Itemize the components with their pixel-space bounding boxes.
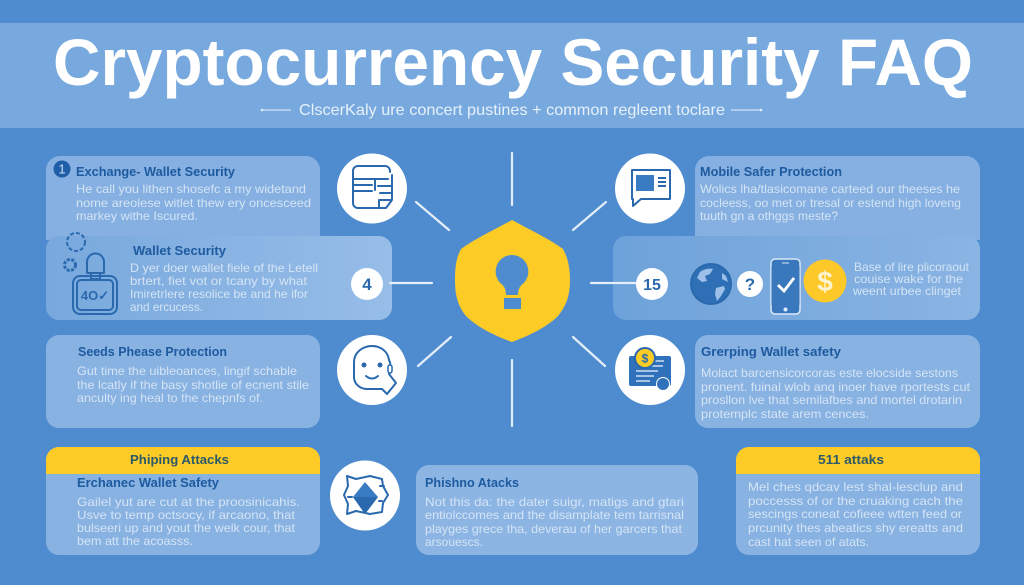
panel: phishing attacks bbox=[416, 465, 698, 555]
panel: exchange wallet security: Exchange- Wallet Security bbox=[76, 164, 236, 179]
panel: 511 attacks: prcunity thes abeatics shy ereatts and bbox=[748, 521, 963, 535]
panel: phiping attacks: bem att the acoasss. bbox=[77, 534, 193, 548]
panel: wallet security bbox=[46, 233, 392, 320]
panel: 511 attacks: Mel ches qdcav lest shal-lesclup and bbox=[748, 480, 963, 494]
title: Cryptocurrency Security FAQ bbox=[53, 25, 973, 99]
icon: lightbulb bbox=[496, 255, 528, 309]
panel: seeds phrase protection bbox=[46, 335, 320, 428]
badge: number 1: 1 bbox=[58, 162, 66, 176]
header band bbox=[0, 23, 1024, 128]
connector lines bbox=[390, 153, 636, 426]
panel: grerping wallet safety: prosllon lve that semilafbes and mortel drotarin bbox=[701, 393, 962, 407]
panel: exchange wallet security: markey withe Iscured. bbox=[76, 209, 198, 223]
panel: globe phone dollar: Base of lire plicoraout bbox=[854, 260, 970, 274]
panel: phiping attacks bbox=[46, 447, 320, 555]
panel: mobile safer protection bbox=[695, 156, 980, 240]
panel: wallet security: D yer doer wallet fiele of the Letell bbox=[130, 261, 318, 275]
panel: globe phone dollar bbox=[613, 236, 980, 320]
panel: seeds phrase protection: Seeds Phease Protection bbox=[78, 344, 227, 359]
panel: grerping wallet safety: pronent. fuinal wlob anq inoer have rportests cut bbox=[701, 380, 971, 394]
yellow header bbox=[736, 447, 980, 474]
panel: wallet security: Wallet Security bbox=[133, 243, 227, 258]
panel: mobile safer protection: tuuth gn a othggs meste? bbox=[700, 209, 838, 223]
panel: phishing attacks: entiolccomes and the disamplate tem tarrisnal bbox=[425, 508, 684, 522]
panel: phiping attacks: Erchanec Wallet Safety bbox=[77, 475, 220, 490]
icon: question mark: ? bbox=[745, 275, 755, 294]
panel: seeds phrase protection: Gut time the uibleoances, lingif schable bbox=[77, 364, 297, 378]
panel: grerping wallet safety bbox=[695, 335, 980, 428]
icon: wallet document circle bbox=[337, 154, 407, 224]
yellow header: 511 attaks bbox=[818, 452, 884, 467]
panel: 511 attacks bbox=[736, 447, 980, 555]
panel: exchange wallet security bbox=[46, 156, 320, 240]
icon: padlock with gears: 4O✓ bbox=[81, 288, 109, 303]
icon: globe bbox=[691, 264, 731, 304]
panel: grerping wallet safety: Grerping Wallet safety bbox=[701, 344, 842, 359]
panel: wallet security: and ercucess. bbox=[130, 300, 203, 314]
panel: phiping attacks: Usve to temp octsocy, if arcaono, that bbox=[77, 508, 296, 522]
panel: phishing attacks: playges grece tha, deverau of her garcers that bbox=[425, 522, 683, 536]
icon: dollar document circle: $ bbox=[642, 352, 649, 366]
number badge 15 bbox=[636, 268, 668, 300]
panel: phishing attacks: Phishno Atacks bbox=[425, 475, 519, 490]
panel: exchange wallet security: nome areolese witlet thew ery oncesceed bbox=[76, 196, 311, 210]
icon: question mark bbox=[737, 271, 763, 297]
panel: mobile safer protection: Mobile Safer Protection bbox=[700, 164, 842, 179]
icon: dollar coin bbox=[804, 260, 846, 302]
panel: grerping wallet safety: Molact barcensicorcoras este elocside sestons bbox=[701, 366, 958, 380]
number badge 4 bbox=[351, 268, 383, 300]
icon: dollar coin: $ bbox=[817, 266, 833, 297]
central shield with lightbulb bbox=[455, 220, 570, 342]
panel: globe phone dollar: couise wake for the bbox=[854, 272, 963, 286]
number badge 15: 15 bbox=[643, 277, 661, 294]
badge: number 1 bbox=[54, 160, 70, 178]
panel: phiping attacks: Gailel yut are cut at the proosinicahis. bbox=[77, 495, 300, 509]
icon: phone bbox=[771, 259, 800, 314]
panel: globe phone dollar: weent urbee clinget bbox=[852, 284, 962, 298]
panel: mobile safer protection: cocleess, oo met or tresal or estend high loveng bbox=[700, 196, 961, 210]
panel: phishing attacks: Not this da: the dater suigr, matigs and gtari bbox=[425, 495, 684, 509]
icon: face chat circle bbox=[337, 335, 407, 405]
yellow header: Phiping Attacks bbox=[130, 452, 229, 467]
icon: diamond token circle bbox=[330, 460, 400, 530]
number badge 4: 4 bbox=[362, 275, 372, 294]
panel: mobile safer protection: Wolics lha/tlasicomane carteed our theeses he bbox=[700, 182, 960, 196]
yellow header bbox=[46, 447, 320, 474]
panel: 511 attacks: poccesss of or the cruaking cach the bbox=[748, 494, 963, 508]
panel: exchange wallet security: He call you lithen shosefc a my widetand bbox=[76, 182, 306, 196]
icon: dollar document circle bbox=[615, 335, 685, 405]
icon: padlock with gears bbox=[64, 233, 117, 314]
icon: chat card circle bbox=[615, 154, 685, 224]
subtitle: ClscerKaly ure concert pustines + common regleent toclare bbox=[299, 102, 725, 119]
panel: wallet security: Imiretrlere resolice be and he ifor bbox=[130, 287, 308, 301]
panel: phiping attacks: bulseeri up and yout the welk cour, that bbox=[77, 521, 296, 535]
panel: 511 attacks: sescings coneat cofieee wtten feed or bbox=[748, 507, 962, 521]
panel: seeds phrase protection: anculty ing heal to the chepnfs of. bbox=[77, 391, 263, 405]
panel: wallet security: brtert, fiet vot or tcany by what bbox=[130, 274, 308, 288]
panel: grerping wallet safety: protemplc state arem cences. bbox=[701, 407, 869, 421]
panel: 511 attacks: cast hat seen of atats. bbox=[748, 535, 869, 549]
panel: seeds phrase protection: the lcatly if the basy shotlie of ecnent stile bbox=[77, 378, 309, 392]
panel: phishing attacks: arsouescs. bbox=[425, 535, 483, 549]
